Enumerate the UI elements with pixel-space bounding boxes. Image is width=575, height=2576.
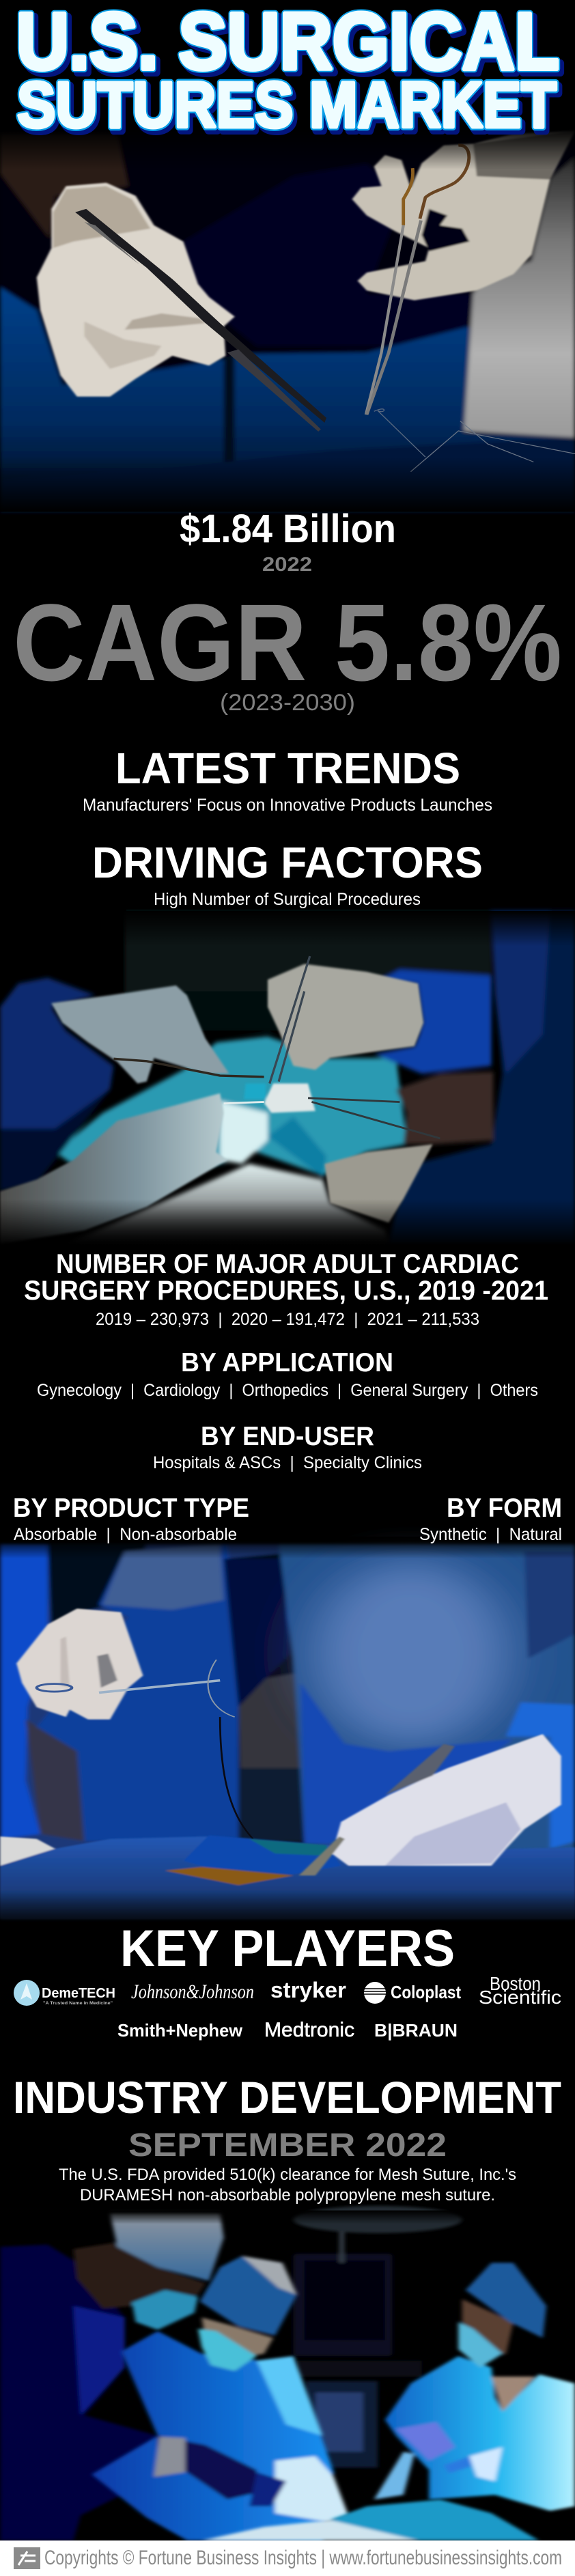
photo: surgical team in operating room — [0, 2206, 575, 2540]
text: product type segments: Absorbable | Non-absorbable — [14, 1525, 237, 1544]
text: application segments: Gynecology | Cardiology | Orthopedics | General Surgery | Others — [37, 1381, 538, 1400]
monitors and equipment — [294, 2206, 462, 2467]
scissors and suture — [366, 145, 575, 472]
text: end-user segments: Hospitals & ASCs | Specialty Clinics — [153, 1453, 422, 1472]
logo: Boston Scientific: Scientific — [479, 1987, 561, 2008]
heading: by form: BY FORM — [447, 1494, 562, 1523]
text: driving factors detail: High Number of Surgical Procedures — [154, 890, 421, 909]
text: latest trends detail: Manufacturers' Focus on Innovative Products Launches — [83, 796, 492, 815]
logo: Coloplast: Coloplast — [391, 1982, 461, 2002]
logo: Boston Scientific — [479, 1973, 561, 2008]
logo: Medtronic: Medtronic — [264, 2019, 354, 2041]
text: form segments: Synthetic | Natural — [419, 1525, 562, 1544]
heading: driving factors: DRIVING FACTORS — [92, 838, 483, 887]
heading: cardiac surgery procedures — [24, 1249, 548, 1306]
patient and drape — [201, 2500, 539, 2540]
heading: cardiac surgery procedures: NUMBER OF MAJOR ADULT CARDIAC — [56, 1249, 519, 1279]
left glove — [37, 183, 235, 397]
right surgeon — [374, 2263, 575, 2511]
text: procedure counts: 2019 – 230,973 | 2020 – 191,472 | 2021 – 211,533 — [96, 1310, 479, 1329]
footer bar — [0, 2540, 575, 2576]
text: development detail — [59, 2166, 516, 2204]
center surgeon — [92, 2256, 348, 2540]
heading: by end-user: BY END-USER — [201, 1422, 374, 1451]
left glove with needle holder — [16, 1608, 143, 1720]
photo: surgeon hands with forceps and scissors — [0, 127, 575, 512]
photo: surgeons in blue gowns with needle holder and scalpel — [0, 1537, 575, 1919]
icon: Fortune Business Insights logo — [14, 2547, 40, 2569]
logo: Stryker: stryker — [270, 1978, 346, 2002]
logo: Johnson & Johnson: Johnson&Johnson — [131, 1980, 254, 2003]
logo: Coloplast — [364, 1982, 461, 2004]
right glove with scalpel — [299, 1734, 561, 1875]
needle holder and suture — [37, 1660, 253, 1839]
text: development detail: The U.S. FDA provided 510(k) clearance for Mesh Suture, Inc.'s — [59, 2166, 516, 2184]
forecast period: (2023-2030) — [220, 690, 355, 716]
logo: B. Braun: B|BRAUN — [374, 2020, 458, 2041]
heading: key players: KEY PLAYERS — [120, 1920, 455, 1978]
logo: Smith+Nephew: Smith+Nephew — [117, 2020, 243, 2041]
logos: key players — [14, 1973, 561, 2041]
fade below the photo — [0, 1892, 575, 1931]
logo: DemeTECH — [14, 1980, 115, 2006]
text: development detail: DURAMESH non-absorbable polypropylene mesh suture. — [80, 2186, 495, 2204]
market size value: $1.84 Billion — [180, 507, 396, 551]
logo: DemeTECH: DemeTECH — [42, 1986, 115, 2001]
logo: DemeTECH: "A Trusted Name in Medicine" — [43, 2001, 113, 2006]
gloves — [0, 964, 433, 1244]
development date: SEPTEMBER 2022 — [128, 2127, 447, 2164]
left surgeon — [0, 2213, 224, 2540]
base year: 2022 — [262, 554, 312, 576]
heading: latest trends: LATEST TRENDS — [115, 744, 460, 793]
heading: by product type: BY PRODUCT TYPE — [13, 1494, 249, 1523]
heading: by application: BY APPLICATION — [181, 1348, 393, 1377]
photo: operating table with gloved hands — [0, 911, 575, 1265]
surgical instruments — [113, 956, 440, 1138]
title — [16, 0, 563, 145]
surgical drape — [0, 1835, 575, 1919]
logo: Boston Scientific: Boston — [490, 1973, 541, 1994]
heading: cardiac surgery procedures: SURGERY PROCEDURES, U.S., 2019 -2021 — [24, 1276, 548, 1306]
right glove — [352, 130, 575, 300]
forceps — [75, 209, 326, 432]
